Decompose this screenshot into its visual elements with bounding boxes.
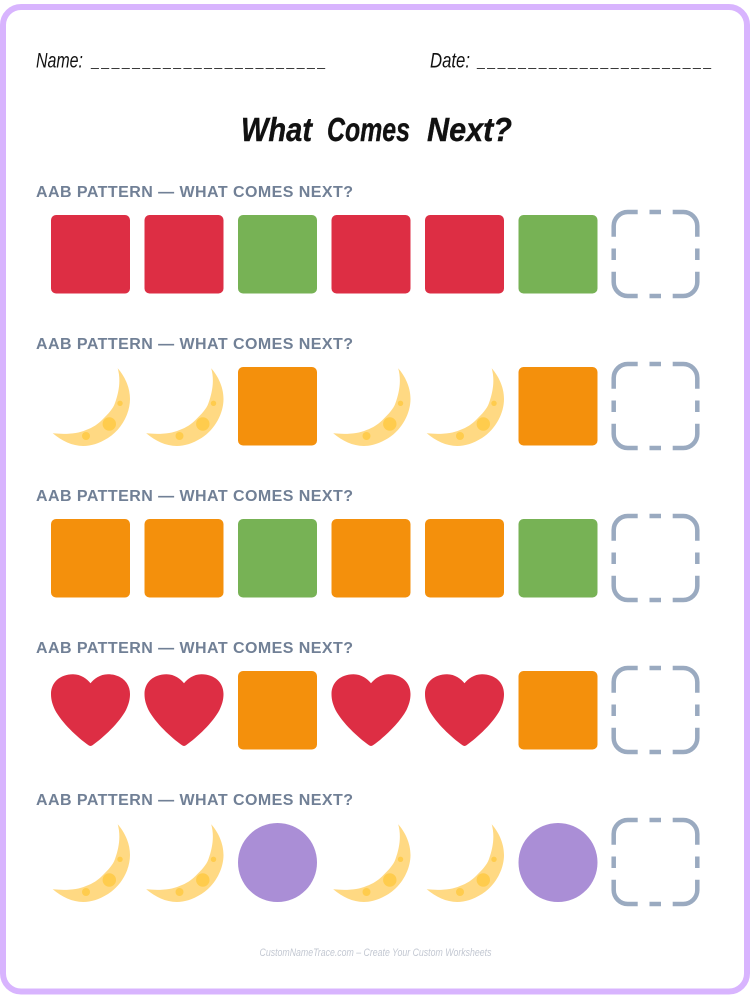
date field: Date: (430, 50, 470, 72)
pattern: row 2 (53, 367, 597, 446)
panel: row 1 (36, 184, 697, 296)
panel: row 2 (36, 336, 697, 448)
heading: row 1: AAB PATTERN — WHAT COMES NEXT? (36, 184, 353, 201)
name field: Name: (36, 50, 83, 72)
answer box: row 5 (614, 820, 697, 904)
date field: _______________________ (476, 53, 714, 69)
heading: row 3: AAB PATTERN — WHAT COMES NEXT? (36, 488, 353, 505)
title (241, 111, 512, 148)
title: Comes (327, 111, 410, 148)
pattern: row 3 (51, 519, 598, 598)
answer box: row 2 (614, 364, 697, 448)
footer: CustomNameTrace.com – Create Your Custom Worksheets (260, 947, 492, 959)
date field (430, 50, 714, 72)
pattern: row 5 (53, 823, 597, 902)
panel: row 5 (36, 792, 697, 904)
heading: row 4: AAB PATTERN — WHAT COMES NEXT? (36, 640, 353, 657)
pattern: row 4 (51, 671, 598, 750)
name field: _______________________ (90, 53, 328, 69)
answer box: row 1 (614, 212, 697, 296)
heading: row 2: AAB PATTERN — WHAT COMES NEXT? (36, 336, 353, 353)
title: What (241, 111, 314, 148)
name field (36, 50, 328, 72)
answer box: row 3 (614, 516, 697, 600)
heading: row 5: AAB PATTERN — WHAT COMES NEXT? (36, 792, 353, 809)
panel: row 4 (36, 640, 697, 752)
answer box: row 4 (614, 668, 697, 752)
panel: row 3 (36, 488, 697, 600)
pattern: row 1 (51, 215, 598, 294)
title: Next? (427, 111, 512, 148)
